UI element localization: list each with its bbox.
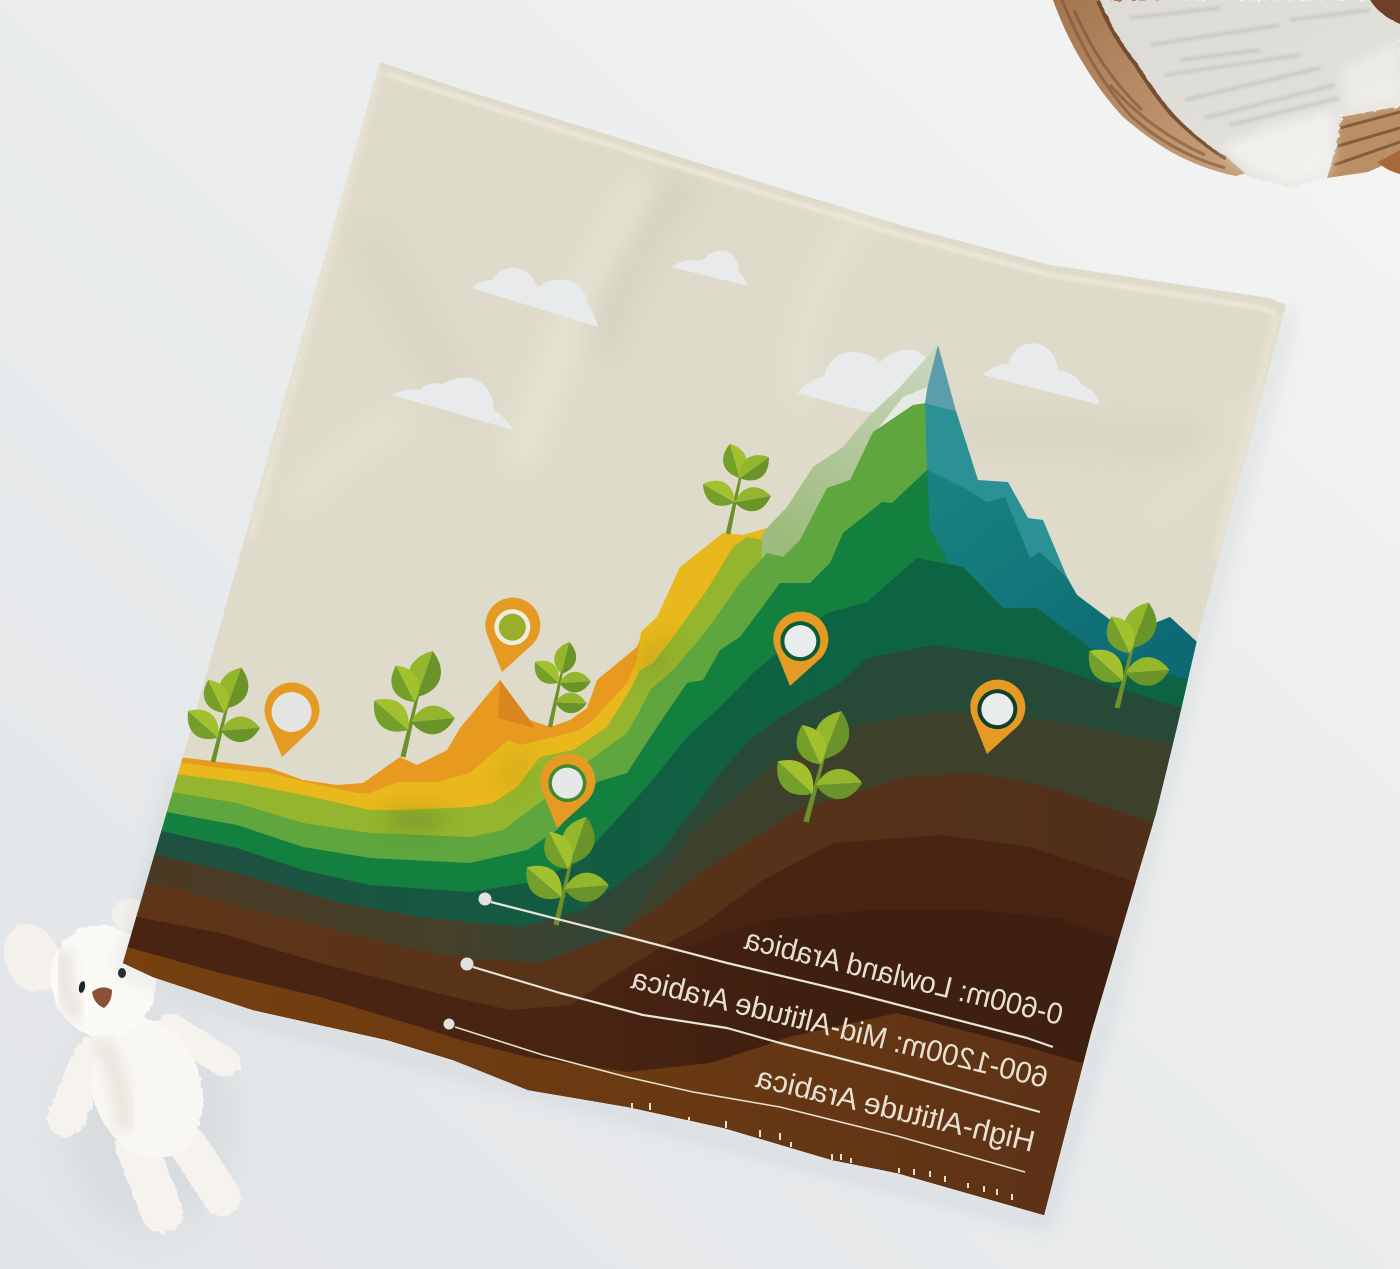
- legend: mid-altitude leader line: [460, 958, 1040, 1112]
- teddy: head: [36, 911, 170, 1051]
- pin: upper slope: [763, 606, 834, 692]
- mountain: strata layers: [123, 345, 1197, 1215]
- layer: bright green band: [150, 470, 980, 1000]
- plant 1: [172, 655, 277, 772]
- layer: grey green: [123, 645, 1182, 1215]
- sky background: [182, 62, 1286, 785]
- pin: lowland: [255, 677, 325, 763]
- layer: olive dark: [620, 710, 1173, 999]
- plant 5: [1071, 588, 1189, 719]
- teddy: body: [73, 1003, 221, 1173]
- pin: mid slope: [530, 748, 601, 834]
- wicker basket with fur: [1053, 0, 1400, 188]
- panel: blanket infographic: [123, 62, 1286, 1215]
- layer: orange foothills: [150, 628, 646, 998]
- layer: cloud gap in ridge: [876, 387, 927, 431]
- pin: foothill summit: [475, 592, 546, 678]
- fabric shading on bands: [385, 634, 676, 830]
- layer: deepest brown: [686, 910, 1119, 1200]
- top hem: [386, 74, 1276, 314]
- layer: teal upper: [925, 403, 1210, 720]
- layer: dark green: [128, 558, 1188, 1215]
- teddy: nose: [92, 987, 112, 1008]
- layer: teal lower: [927, 470, 1210, 720]
- legend: lowland leader line: [478, 892, 1053, 1047]
- plant 7: [509, 803, 627, 936]
- clouds: [392, 250, 1100, 430]
- layer: orange facet: [498, 680, 535, 728]
- layer: yellow band: [150, 528, 800, 1000]
- fabric folds: [300, 185, 1240, 520]
- plant 4: [690, 434, 785, 542]
- layer: mid green band: [150, 403, 940, 1000]
- teddy: arms and legs: [66, 1028, 225, 1212]
- teddy: eyes: [78, 968, 126, 993]
- pin: right slope: [960, 674, 1031, 760]
- legend: mid-altitude label: 600-1200m: Mid-Altitude Arabica: [628, 962, 1051, 1095]
- layer: pale green ridge: [760, 345, 938, 620]
- teddy: ears: [0, 899, 148, 1001]
- blanket shadow: [123, 310, 1289, 1222]
- cut-off text fringe: [632, 1103, 1012, 1200]
- legend: lowland label: 0-600m: Lowland Arabica: [741, 923, 1066, 1032]
- plant 6: [757, 695, 884, 835]
- layer: dark brown: [123, 835, 1136, 1215]
- layer: teal peak tip: [925, 345, 956, 411]
- legend: high-altitude leader line: [444, 1018, 1025, 1172]
- plant 2: [357, 638, 473, 767]
- layer: orange brown base: [123, 947, 1084, 1215]
- layer: olive band: [150, 537, 850, 1000]
- layer: brown: [123, 773, 1153, 1215]
- legend: high-altitude label: High-Altitude Arabica: [753, 1061, 1038, 1159]
- plant 3: [517, 635, 601, 734]
- teddy bear toy: [0, 899, 235, 1230]
